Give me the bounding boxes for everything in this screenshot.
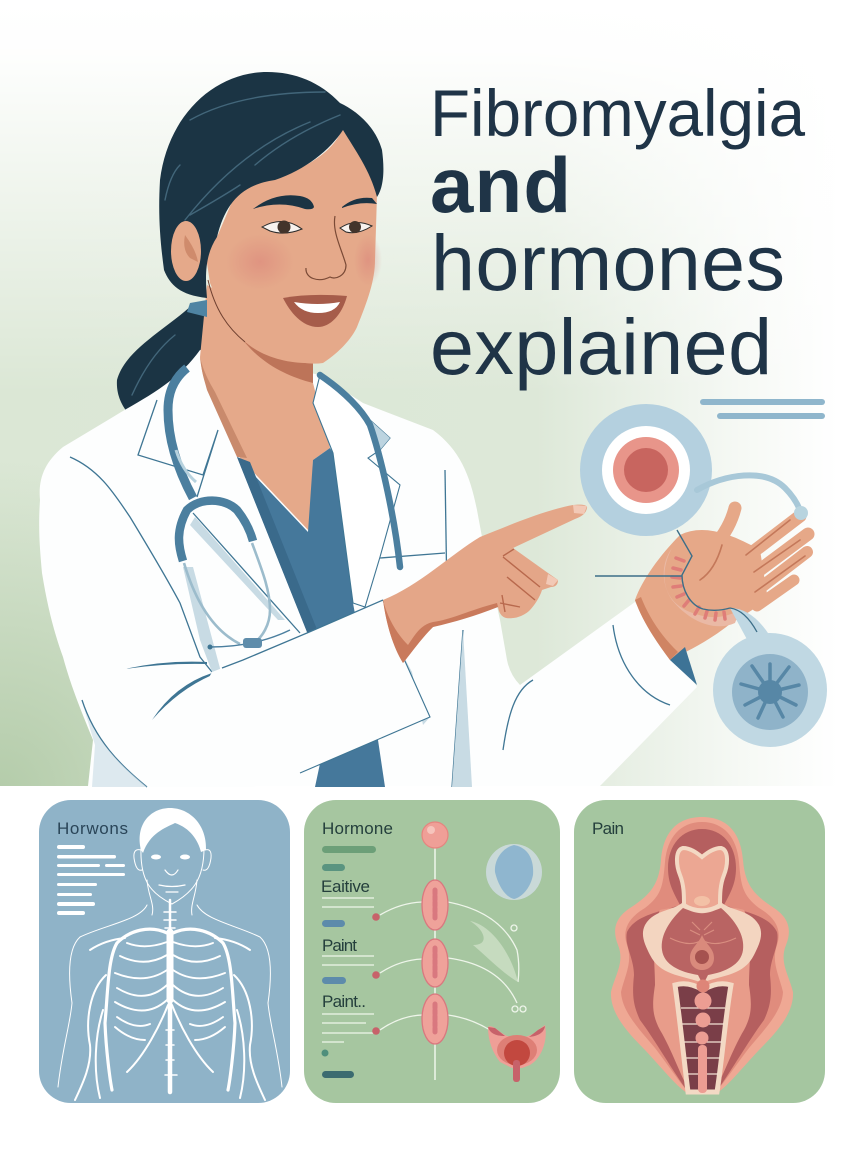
- rib lines: [681, 1008, 725, 1074]
- dark muscle layer: [626, 829, 778, 1092]
- panel labels: [321, 819, 393, 1011]
- text placeholder lines: [57, 845, 125, 915]
- hair highlights: [132, 92, 340, 395]
- connector dots: [372, 913, 380, 1035]
- face: [205, 128, 377, 364]
- chest: [662, 908, 743, 985]
- left lapel: [138, 400, 218, 497]
- outer layer: [611, 817, 793, 1093]
- ear: [171, 221, 201, 281]
- doctor figure: [39, 72, 697, 787]
- pale shoulders: [643, 900, 761, 982]
- scrubs: [237, 448, 385, 787]
- collar bones and side nerves: [105, 929, 235, 1090]
- shoulders and arms: [58, 905, 282, 1087]
- spine axis: [434, 835, 436, 1080]
- right sleeve cuff: [670, 647, 697, 685]
- knuckle creases: [500, 549, 540, 612]
- callout: nerve cell: [713, 608, 827, 747]
- faint leaf shape: [470, 921, 518, 982]
- hand shadow: [383, 600, 498, 663]
- open hand: [595, 508, 808, 660]
- lower cavity: [675, 984, 731, 1092]
- spine: [169, 900, 171, 932]
- fingernails: [573, 505, 587, 514]
- callout: inflamed joint: [580, 404, 800, 536]
- title: and: [430, 141, 571, 229]
- sphere organ: [486, 844, 542, 900]
- inner salmon layer: [653, 906, 751, 1092]
- panel: hormone pathway: [304, 800, 560, 1103]
- head and neck: [677, 848, 727, 910]
- chest details: [670, 922, 736, 944]
- gland top: [422, 822, 448, 848]
- neck and chest: [200, 285, 330, 532]
- panel: nervous system: [39, 800, 290, 1103]
- right lapel: [313, 375, 400, 607]
- stethoscope: [168, 368, 400, 650]
- title: hormones: [431, 218, 785, 307]
- background gradient: [0, 0, 864, 786]
- inflammation ticks: [672, 558, 725, 620]
- fingers: [713, 508, 808, 606]
- finger creases: [700, 520, 805, 592]
- panel labels: Paint: [322, 936, 357, 955]
- wrist inflammation band: [664, 548, 740, 626]
- title: Fibromyalgia: [430, 77, 806, 150]
- mouth: [283, 295, 347, 327]
- title: explained: [430, 302, 772, 391]
- second layer: [621, 822, 783, 1092]
- coat fold lines: [70, 457, 670, 787]
- panel label: Pain: [592, 819, 624, 838]
- panel: anatomy pain: [574, 800, 825, 1103]
- eyebrows: [253, 195, 314, 209]
- body outline figure: [58, 808, 282, 1100]
- anatomical figure: [611, 817, 793, 1093]
- central organ: [690, 935, 714, 970]
- connecting curves: [380, 902, 526, 1030]
- eyes: [262, 220, 372, 234]
- title: [430, 77, 806, 391]
- panel labels: Eaitive: [321, 877, 370, 896]
- lab coat: [39, 350, 697, 786]
- ribs: [115, 942, 225, 1040]
- legend pills and lines: [322, 846, 376, 1078]
- hair: [140, 808, 206, 853]
- panel labels: Paint..: [322, 992, 366, 1011]
- wrist shadow: [635, 597, 678, 660]
- cheeks: [226, 234, 294, 290]
- vertebra beads: [694, 980, 712, 1093]
- arm nerves: [75, 938, 265, 1100]
- decorative title bars: [700, 399, 825, 419]
- nose: [306, 216, 346, 280]
- pointing sleeve: [150, 600, 430, 787]
- pelvic organ: [488, 1025, 546, 1082]
- tapered fold strokes: [125, 662, 223, 758]
- gland ovals: [422, 880, 448, 1044]
- annotation lines: [595, 530, 730, 610]
- hair tie: [187, 300, 207, 317]
- coat shading: [83, 567, 472, 787]
- neck side shadow: [200, 357, 247, 458]
- hair: [159, 72, 383, 298]
- knob on fingertip: [794, 506, 808, 520]
- panel labels: Hormone: [322, 819, 393, 838]
- ponytail: [117, 305, 207, 412]
- face: [134, 848, 211, 915]
- panel label: Horwons: [57, 819, 128, 838]
- neck shadow: [243, 340, 313, 383]
- pointing hand: [383, 505, 587, 663]
- jaw line: [208, 280, 245, 342]
